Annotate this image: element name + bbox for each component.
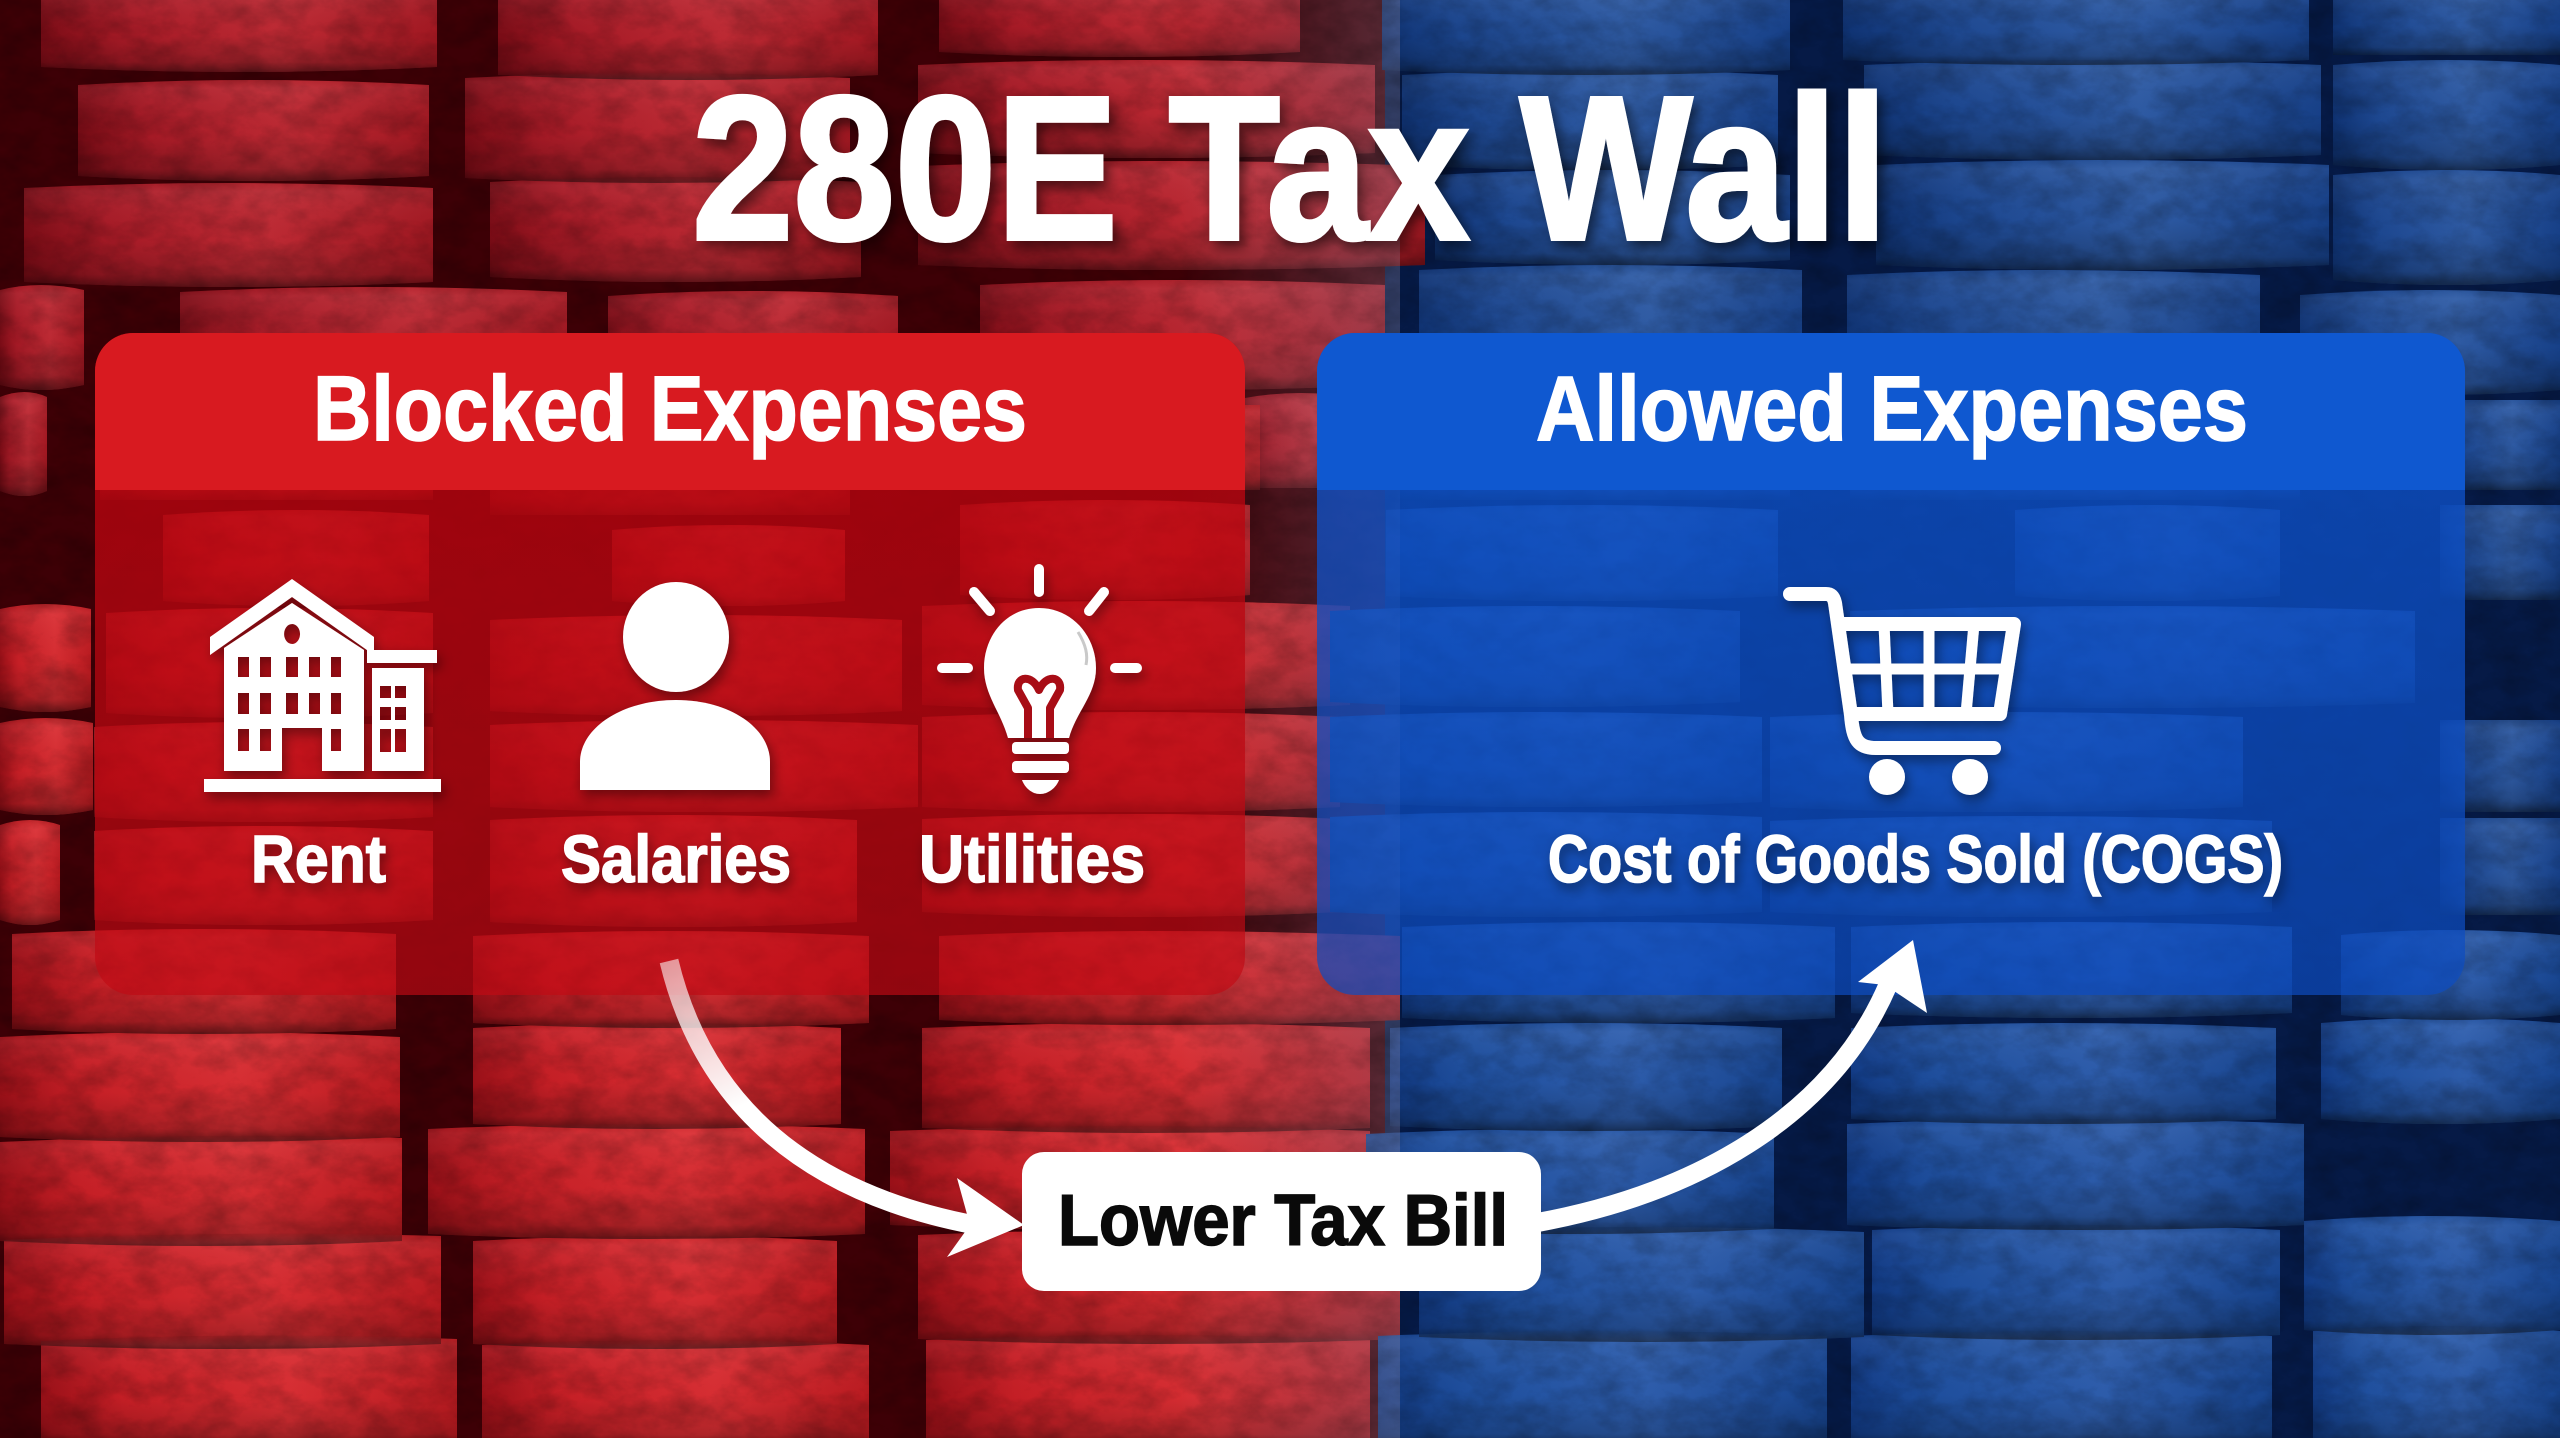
label: salaries: Salaries	[561, 822, 791, 897]
red bricks	[0, 0, 1425, 1438]
arrow: lower tax bill to allowed	[1535, 940, 1927, 1223]
label: utilities: Utilities	[919, 822, 1145, 897]
panel body: allowed	[1317, 333, 2465, 995]
callout: lower tax bill	[1022, 1152, 1541, 1291]
panel header: allowed	[1317, 333, 2465, 490]
callout: lower tax bill: Lower Tax Bill	[1058, 1181, 1508, 1261]
label: rent: Rent	[251, 822, 386, 897]
heading: blocked expenses: Blocked Expenses	[313, 358, 1027, 460]
panel: blocked expenses	[95, 333, 1245, 995]
arrow: blocked to lower tax bill	[669, 961, 1024, 1257]
panel header: blocked	[95, 333, 1245, 490]
icon: shopping cart	[1790, 594, 2014, 795]
panel body: blocked	[95, 333, 1245, 995]
label: cost of goods sold: Cost of Goods Sold (COGS)	[1548, 822, 2283, 897]
icon: building	[204, 579, 441, 792]
panel: allowed expenses	[1317, 333, 2465, 995]
icon: light bulb	[942, 569, 1137, 794]
title: 280E Tax Wall	[692, 54, 1888, 283]
blue bricks	[1330, 0, 2560, 1438]
icon: person	[580, 582, 770, 790]
heading: allowed expenses: Allowed Expenses	[1536, 358, 2248, 460]
